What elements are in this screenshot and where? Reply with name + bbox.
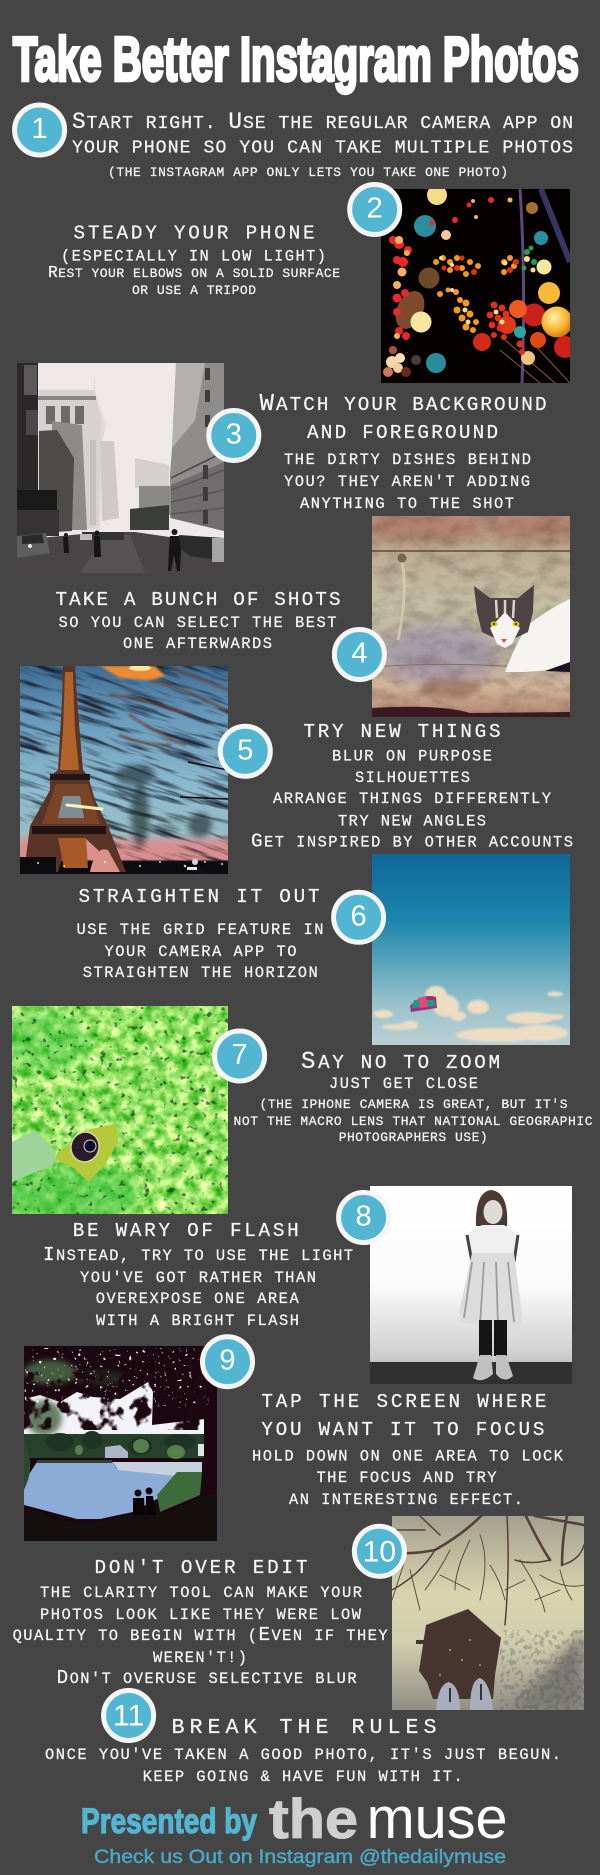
step 2 text: (ESPECIALLY IN LOW LIGHT) (61, 248, 326, 266)
badge 3 (209, 410, 259, 460)
panel: step 11 break the rules (45, 1690, 561, 1786)
step 7 text: PHOTOGRAPHERS USE) (339, 1130, 488, 1145)
step 4 text: SO YOU CAN SELECT THE BEST (58, 614, 336, 632)
step 5 text: ARRANGE THINGS DIFFERENTLY (273, 790, 551, 808)
step 3 text: YOU? THEY AREN'T ADDING (284, 473, 530, 491)
badge 6: 6 (351, 900, 367, 932)
logo: the muse: the (269, 1787, 358, 1850)
badge 6 (334, 892, 384, 942)
badge 4 (334, 630, 384, 680)
step 5 text: SILHOUETTES (355, 769, 470, 787)
badge 3: 3 (226, 418, 242, 450)
step 3 text: THE DIRTY DISHES BEHIND (284, 451, 531, 469)
panel: step 2 steady your phone (48, 184, 576, 383)
badge 7 (215, 1031, 265, 1081)
step 6 text (76, 886, 324, 982)
panel: step 4 bunch of shots (56, 516, 590, 717)
step 7 text: NOT THE MACRO LENS THAT NATIONAL GEOGRAPHIC (234, 1114, 593, 1129)
logo: the muse (269, 1786, 508, 1851)
step 2 text (48, 223, 340, 298)
panel: step 7 say no to zoom (0, 1006, 593, 1225)
step 10 text (13, 1557, 388, 1689)
panel: step 10 don't over edit (13, 1516, 584, 1710)
step 7 text (234, 1049, 593, 1145)
step 2 text: OR USE A TRIPOD (132, 283, 256, 298)
badge 10: 10 (363, 1536, 396, 1568)
step 8 text: OVEREXPOSE ONE AREA (96, 1290, 299, 1308)
step 3 text (260, 391, 546, 513)
step 9 text: AN INTERESTING EFFECT. (289, 1491, 523, 1509)
step 9 text: HOLD DOWN ON ONE AREA TO LOCK (252, 1448, 564, 1466)
step 2 text: STEADY YOUR PHONE (74, 223, 314, 245)
step 4 text (56, 589, 340, 653)
presented by label: Presented by (81, 1802, 257, 1841)
instagram call to action: Check us Out on Instagram @thedailymuse (94, 1847, 506, 1868)
step 4 text: ONE AFTERWARDS (123, 635, 272, 653)
step 5 text: TRY NEW THINGS (304, 721, 500, 743)
step 3 text: WATCH YOUR BACKGROUND (260, 391, 546, 418)
badge 2: 2 (367, 192, 383, 224)
step 3 text: AND FOREGROUND (307, 422, 498, 444)
step 10 text: QUALITY TO BEGIN WITH (EVEN IF THEY (13, 1624, 388, 1646)
badge 9 (202, 1337, 252, 1387)
step 3 text: ANYTHING TO THE SHOT (300, 495, 514, 513)
cluster lights (433, 255, 517, 333)
panel: step 3 background and foreground (17, 363, 546, 573)
badge 8 (339, 1192, 389, 1242)
step 11 text: KEEP GOING & HAVE FUN WITH IT. (143, 1768, 463, 1786)
badge 8: 8 (356, 1200, 372, 1232)
step 8 text: WITH A BRIGHT FLASH (96, 1312, 299, 1330)
step 8 text: INSTEAD, TRY TO USE THE LIGHT (43, 1244, 353, 1266)
step 2 text: REST YOUR ELBOWS ON A SOLID SURFACE (48, 263, 340, 282)
step 7 text: JUST GET CLOSE (329, 1075, 478, 1093)
step 9 text: YOU WANT IT TO FOCUS (261, 1419, 544, 1441)
step 6 text: YOUR CAMERA APP TO (104, 943, 296, 961)
photo: cat on stone (372, 516, 570, 717)
step 8 text (43, 1220, 353, 1330)
step 5 text (251, 721, 573, 852)
footer: presented by the muse (81, 1786, 508, 1868)
badge 5: 5 (237, 734, 253, 766)
step 10 text: THE CLARITY TOOL CAN MAKE YOUR (40, 1584, 362, 1602)
step 10 text: WEREN'T!) (153, 1649, 247, 1667)
step 8 text: YOU'VE GOT RATHER THAN (80, 1269, 316, 1287)
photo: umbrella reflection (392, 1516, 584, 1710)
step 6 text: STRAIGHTEN IT OUT (78, 886, 320, 908)
step 11 text: ONCE YOU'VE TAKEN A GOOD PHOTO, IT'S JUST BEGUN. (45, 1746, 561, 1764)
step 6 text: STRAIGHTEN THE HORIZON (83, 964, 318, 982)
step 5 text: BLUR ON PURPOSE (332, 748, 492, 766)
step 1 text: YOUR PHONE SO YOU CAN TAKE MULTIPLE PHOTOS (72, 138, 573, 158)
step 9 text: TAP THE SCREEN WHERE (261, 1391, 546, 1413)
photo: girl in dress (370, 1186, 572, 1384)
photo: city street (17, 363, 224, 573)
badge 1: 1 (32, 113, 48, 145)
panel: step 5 try new things (0, 532, 573, 907)
photo: parasail in sky (372, 854, 570, 1045)
badge 5 (220, 726, 270, 776)
panel: step 1 start right (15, 105, 573, 180)
step 8 text: BE WARY OF FLASH (73, 1220, 299, 1242)
badge 7: 7 (232, 1039, 248, 1071)
badge 9: 9 (219, 1345, 236, 1377)
photo: Eiffel tower (20, 666, 228, 874)
badge 2 (350, 184, 400, 234)
step 4 text: TAKE A BUNCH OF SHOTS (56, 589, 340, 611)
step 5 text: GET INSPIRED BY OTHER ACCOUNTS (251, 830, 573, 852)
step 1 text (72, 109, 573, 180)
step 7 text: (THE IPHONE CAMERA IS GREAT, BUT IT'S (260, 1097, 568, 1112)
photo: frog in leaves (12, 1006, 228, 1214)
bottom left cluster (383, 346, 421, 377)
step 1 text: START RIGHT. USE THE REGULAR CAMERA APP ON (72, 109, 573, 135)
badge 11 (104, 1690, 154, 1740)
step 9 text: THE FOCUS AND TRY (316, 1469, 496, 1487)
step 10 text: PHOTOS LOOK LIKE THEY WERE LOW (40, 1606, 362, 1624)
badge 4: 4 (351, 638, 367, 670)
photo: night lanterns (381, 189, 570, 383)
panel: step 6 straighten it out (76, 854, 570, 1045)
step 1 text: (THE INSTAGRAM APP ONLY LETS YOU TAKE ONE PHOTO) (108, 165, 508, 180)
badge 11: 11 (113, 1700, 144, 1732)
step 10 text: DON'T OVERUSE SELECTIVE BLUR (57, 1667, 357, 1689)
step 9 text (252, 1391, 564, 1509)
panel: step 9 tap the screen (24, 1337, 564, 1541)
step 11 text (45, 1715, 561, 1786)
panel: step 8 be wary of flash (43, 1186, 572, 1384)
badge 10 (354, 1526, 404, 1576)
step 6 text: USE THE GRID FEATURE IN (76, 921, 324, 939)
step 10 text: DON'T OVER EDIT (94, 1557, 308, 1579)
step 11 text: BREAK THE RULES (172, 1715, 436, 1740)
photo: lake through trees (24, 1346, 217, 1541)
badge 1 (15, 105, 65, 155)
logo: the muse: muse (367, 1786, 508, 1851)
step 7 text: SAY NO TO ZOOM (301, 1049, 500, 1076)
step 5 text: TRY NEW ANGLES (338, 812, 486, 830)
